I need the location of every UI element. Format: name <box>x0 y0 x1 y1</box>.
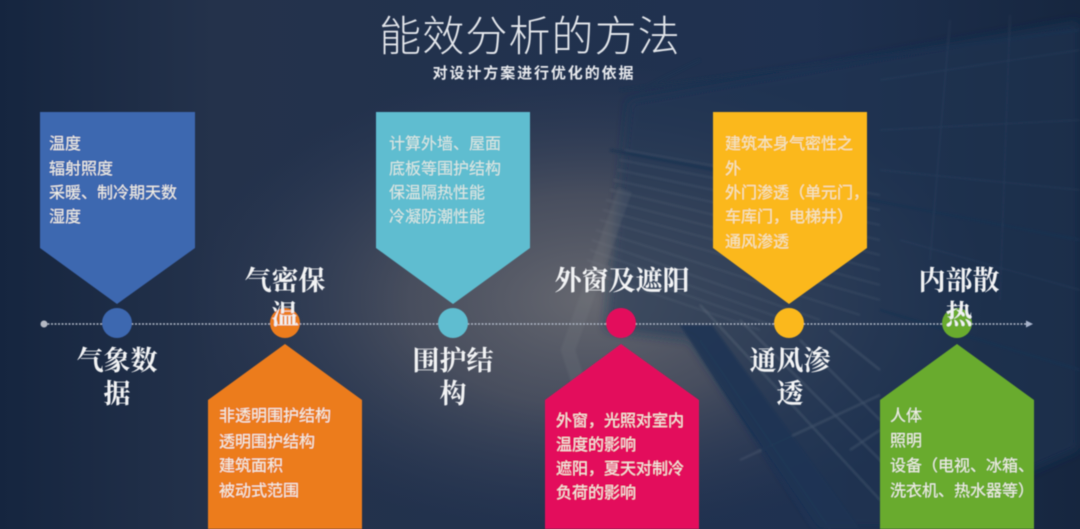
pink callout shape <box>545 344 699 529</box>
title: 能效分析的方法 <box>379 13 681 60</box>
orange callout text: 透明围护结构 <box>219 433 315 451</box>
left facade edge <box>568 190 625 480</box>
green callout text: 照明 <box>890 432 922 450</box>
green callout text: 设备（电视、冰箱、 <box>890 457 1034 475</box>
teal callout text: 保温隔热性能 <box>389 184 485 202</box>
facade dark seams <box>610 30 1080 370</box>
heading: 内部散热 <box>918 266 1000 330</box>
pink node <box>606 308 636 338</box>
blue callout text: 湿度 <box>49 208 81 226</box>
panel: 通风渗透 <box>713 112 869 409</box>
heading: 围护结构: 围护结 <box>412 346 494 376</box>
building facade mass <box>605 20 1080 529</box>
heading: 气象数据: 据 <box>104 378 130 409</box>
heading: 通风渗透 <box>750 345 830 409</box>
green callout shape <box>880 344 1034 529</box>
green callout text <box>890 407 1034 500</box>
pink callout text: 负荷的影响 <box>556 484 636 502</box>
blue callout text: 辐射照度 <box>49 160 113 178</box>
panel: 内部散热 <box>880 266 1034 529</box>
panel: 围护结构 <box>376 112 530 409</box>
heading: 内部散热: 热 <box>946 300 974 330</box>
facade stripes <box>584 150 880 330</box>
teal callout shape <box>376 112 530 304</box>
dark diagonal band <box>680 325 860 529</box>
panel: 气密保温 <box>208 266 362 529</box>
green callout text: 人体 <box>890 407 922 425</box>
heading: 气密保温: 温 <box>272 300 298 330</box>
yellow callout text: 建筑本身气密性之 <box>725 135 853 153</box>
orange callout text <box>219 407 331 500</box>
heading: 气密保温: 气密保 <box>244 266 326 296</box>
teal callout text <box>389 134 501 226</box>
green node <box>942 308 972 338</box>
yellow callout text: 通风渗透 <box>725 233 789 251</box>
orange callout shape <box>208 344 362 529</box>
pink callout text: 温度的影响 <box>556 436 636 454</box>
teal callout text: 计算外墙、屋面 <box>389 134 501 153</box>
subtitle: 对设计方案进行优化的依据 <box>433 64 635 82</box>
heading: 内部散热: 内部散 <box>918 266 1000 296</box>
blue node <box>102 308 132 338</box>
panel: 外窗及遮阳 <box>545 265 699 529</box>
heading: 通风渗透: 透 <box>776 379 804 409</box>
heading: 气密保温 <box>244 266 326 330</box>
pink callout text: 外窗，光照对室内 <box>556 412 684 430</box>
teal node <box>438 308 468 338</box>
heading: 外窗及遮阳: 外窗及遮阳 <box>554 265 690 296</box>
blue callout text <box>49 135 177 226</box>
blue callout shape <box>40 112 195 304</box>
heading: 气象数据 <box>76 346 158 409</box>
heading: 围护结构 <box>412 346 494 409</box>
timeline with arrow <box>40 320 1033 328</box>
pink callout text: 遮阳，夏天对制冷 <box>556 460 684 478</box>
teal callout text: 冷凝防潮性能 <box>389 208 485 226</box>
orange callout text: 被动式范围 <box>219 482 299 500</box>
yellow node <box>774 308 804 338</box>
building photo backdrop <box>568 15 1080 529</box>
blue callout text: 温度 <box>49 135 81 153</box>
yellow callout text <box>725 135 869 251</box>
heading: 围护结构: 构 <box>440 378 466 409</box>
orange callout text: 建筑面积 <box>219 457 283 475</box>
heading: 通风渗透: 通风渗 <box>750 345 830 376</box>
green callout text: 洗衣机、热水器等） <box>890 482 1034 500</box>
teal callout text: 底板等围护结构 <box>389 160 501 178</box>
lower diagonal lines <box>700 305 890 529</box>
blue callout text: 采暖、制冷期天数 <box>49 184 177 202</box>
panel: 气象数据 <box>40 112 195 409</box>
yellow callout shape <box>713 112 867 304</box>
pink callout text <box>556 412 684 502</box>
yellow callout text: 车库门，电梯井） <box>725 208 853 226</box>
upper grid lines <box>880 15 1080 300</box>
heading: 气象数据: 气象数 <box>76 346 158 376</box>
orange callout text: 非透明围护结构 <box>219 407 331 425</box>
orange node <box>270 308 300 338</box>
yellow callout text: 外 <box>725 160 741 178</box>
yellow callout text: 外门渗透（单元门， <box>725 184 869 202</box>
